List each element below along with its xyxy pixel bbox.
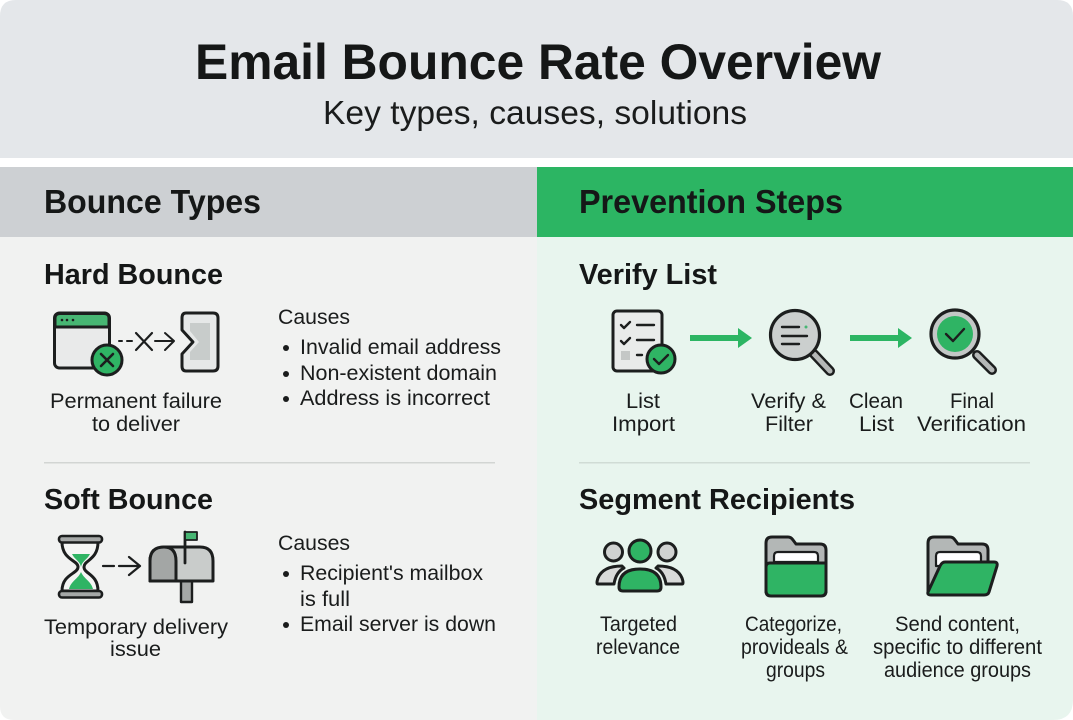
- icon: magnifier with lines: [770, 310, 830, 371]
- panel: prevention steps: [537, 167, 1073, 720]
- hard bounce caption: Permanent failure: [50, 390, 222, 413]
- soft bounce causes: Causes: [278, 532, 350, 555]
- step labels: verify list: Import: [612, 413, 675, 436]
- step labels: verify list: [612, 390, 1026, 436]
- soft bounce causes: [278, 532, 496, 636]
- bounce types heading bar: [0, 167, 537, 237]
- hard bounce causes: Causes: [278, 306, 350, 329]
- hard bounce causes: [278, 306, 501, 410]
- step labels: verify list: Clean: [849, 390, 903, 413]
- hard bounce heading: Hard Bounce: [44, 259, 223, 291]
- icon: open folder: [928, 537, 997, 595]
- arrow: import to verify: [690, 328, 752, 348]
- step labels: segment recipients: relevance: [596, 636, 680, 659]
- step labels: verify list: List: [859, 413, 894, 436]
- icon: closed folder: [766, 537, 826, 596]
- hard bounce causes: Non-existent domain: [300, 362, 497, 385]
- soft bounce caption: Temporary delivery: [44, 616, 229, 639]
- hard bounce causes: Address is incorrect: [300, 387, 490, 410]
- title: Email Bounce Rate Overview: [195, 34, 881, 90]
- header band: [0, 0, 1073, 158]
- step labels: segment recipients: Send content,: [895, 613, 1020, 636]
- soft bounce heading: Soft Bounce: [44, 484, 213, 516]
- step labels: segment recipients: Categorize,: [745, 613, 842, 636]
- step labels: segment recipients: specific to different: [873, 636, 1042, 659]
- step labels: segment recipients: Targeted: [600, 613, 677, 636]
- hard bounce caption: to deliver: [92, 413, 180, 436]
- step labels: verify list: Verification: [917, 413, 1026, 436]
- panel: bounce types: [0, 167, 537, 720]
- soft bounce caption: [44, 616, 229, 661]
- step labels: segment recipients: provideals &: [741, 636, 848, 659]
- soft bounce caption: issue: [110, 638, 161, 661]
- icon: list import: [613, 311, 675, 373]
- step labels: verify list: List: [626, 390, 660, 413]
- soft bounce causes: is full: [300, 588, 350, 611]
- prevention steps heading bar: Prevention Steps: [579, 183, 843, 220]
- subtitle: Key types, causes, solutions: [323, 94, 747, 131]
- soft bounce causes: Recipient's mailbox: [300, 562, 483, 585]
- step labels: segment recipients: audience groups: [884, 659, 1031, 682]
- soft bounce causes: Email server is down: [300, 613, 496, 636]
- arrow: verify to final: [850, 328, 912, 348]
- segment recipients heading: Segment Recipients: [579, 484, 855, 516]
- icon: hourglass to mailbox: [59, 532, 213, 602]
- hard bounce causes: Invalid email address: [300, 336, 501, 359]
- icon: people group: [597, 540, 683, 591]
- verify list heading: Verify List: [579, 259, 717, 291]
- icon: magnifier with check: [931, 310, 992, 370]
- step labels: verify list: Final: [950, 390, 994, 413]
- hard bounce caption: [50, 390, 222, 436]
- step labels: segment recipients: groups: [766, 659, 825, 682]
- bounce types heading bar: Bounce Types: [44, 183, 261, 220]
- step labels: verify list: Verify &: [751, 390, 826, 413]
- step labels: verify list: Filter: [765, 413, 813, 436]
- step labels: segment recipients: [596, 613, 1042, 682]
- prevention steps heading bar: [537, 167, 1073, 237]
- icon: failed delivery: [54, 313, 218, 375]
